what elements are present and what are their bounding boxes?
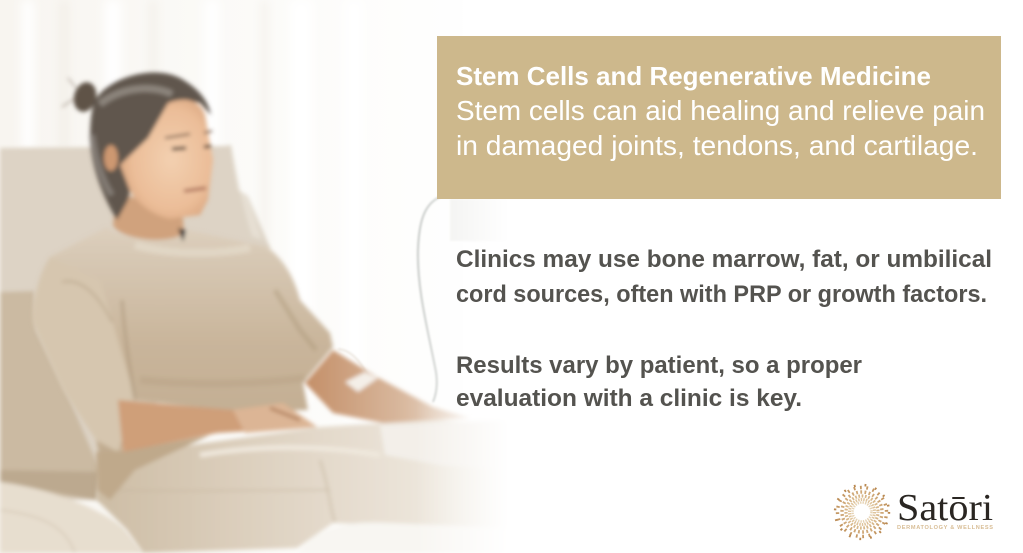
recliner chair <box>0 145 270 553</box>
photo: patient in a recliner <box>0 0 520 553</box>
text block: stem cell sources <box>456 246 992 308</box>
logo: Satori <box>835 485 993 539</box>
hair <box>90 72 211 220</box>
bandage <box>345 372 378 392</box>
far arm of patient with IV <box>305 350 470 423</box>
curtain background <box>0 0 274 553</box>
icon: sunburst <box>835 485 889 539</box>
text block: results vary: evaluation with a clinic is key. <box>456 385 802 412</box>
ear <box>104 145 118 171</box>
panel description: in damaged joints, tendons, and cartilage. <box>456 130 978 161</box>
panel description <box>456 95 985 161</box>
IV tube and device <box>338 196 468 403</box>
heading: Stem Cells and Regenerative Medicine <box>456 61 931 91</box>
text block: stem cell sources: cord sources, often with PRP or growth factors. <box>456 281 987 308</box>
eyes and mouth <box>165 131 212 138</box>
near forearm and hands <box>116 398 246 453</box>
pants <box>97 420 510 553</box>
face <box>120 100 213 219</box>
tagline: DERMATOLOGY & WELLNESS <box>897 525 993 531</box>
patient figure <box>32 72 510 553</box>
text block: results vary <box>456 352 862 412</box>
neck <box>113 195 184 240</box>
panel description: Stem cells can aid healing and relieve pain <box>456 95 985 126</box>
sweater <box>33 227 333 458</box>
text block: stem cell sources: Clinics may use bone marrow, fat, or umbilical <box>456 246 992 273</box>
text block: results vary: Results vary by patient, so a proper <box>456 352 862 379</box>
panel: headline box <box>437 36 1001 199</box>
wordmark: Satōri <box>897 487 993 529</box>
bun <box>70 80 100 114</box>
